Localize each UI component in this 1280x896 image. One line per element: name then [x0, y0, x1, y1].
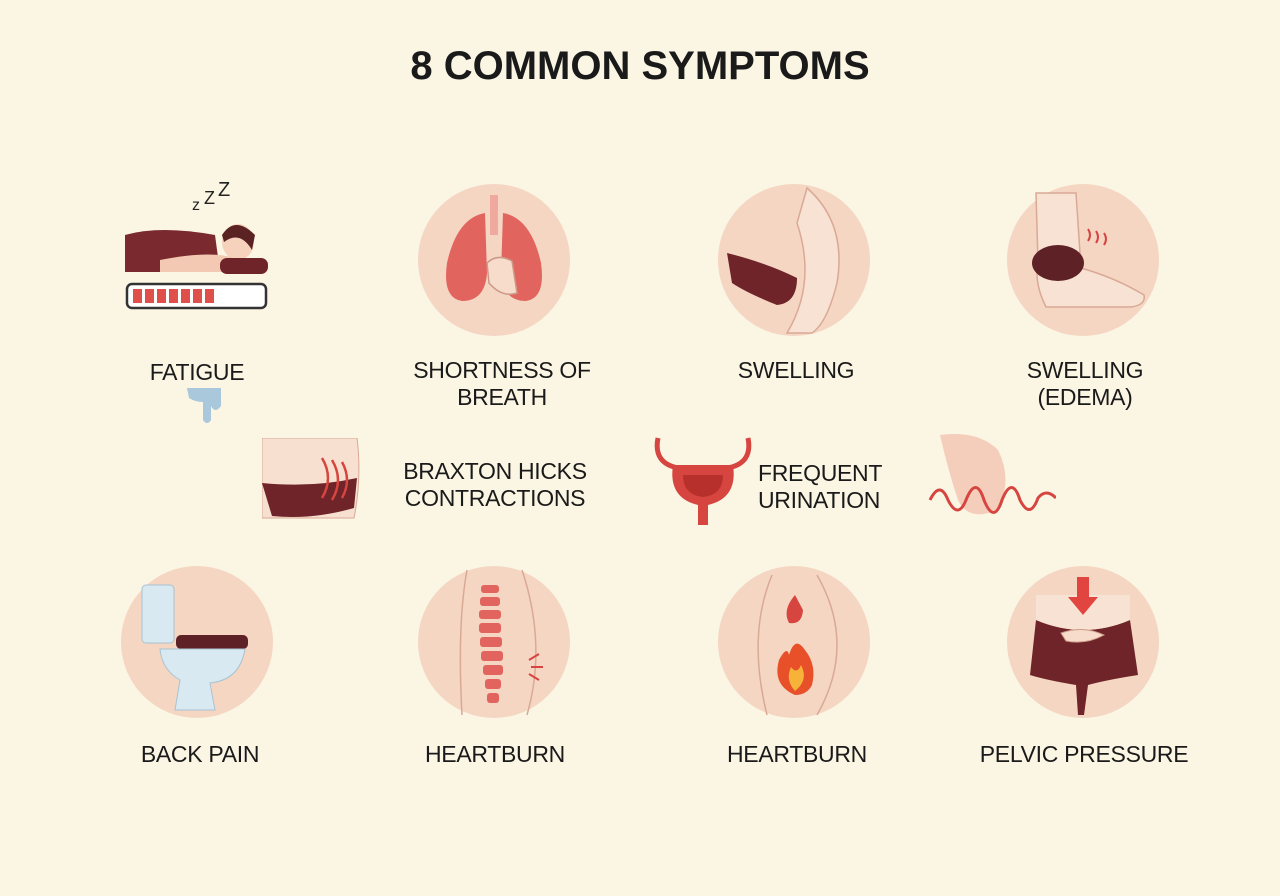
label: back pain: BACK PAIN	[141, 741, 259, 767]
icon: spine circle	[418, 566, 570, 718]
label: pelvic pressure: PELVIC PRESSURE	[980, 741, 1188, 767]
label: frequent urination	[758, 460, 882, 513]
label: braxton hicks	[403, 458, 587, 511]
label: heartburn 1: HEARTBURN	[425, 741, 565, 767]
title: 8 COMMON SYMPTOMS	[410, 44, 870, 88]
icon: pelvic pressure circle	[1007, 566, 1159, 718]
icon: pelvic wave	[928, 434, 1056, 514]
icon: swelling belly circle	[718, 184, 870, 336]
label: swelling edema	[1027, 357, 1143, 410]
label: swelling edema: (EDEMA)	[1037, 384, 1132, 410]
label: fatigue: FATIGUE	[150, 359, 244, 385]
icon: fatigue sleeping person: z	[192, 197, 200, 214]
label: shortness of breath	[413, 357, 591, 410]
icon: ankle edema circle	[1007, 184, 1159, 336]
icon: lungs circle	[418, 184, 570, 336]
label: frequent urination: URINATION	[758, 487, 880, 513]
label: braxton hicks: BRAXTON HICKS	[403, 458, 587, 484]
icon: drip	[187, 388, 221, 423]
label: swelling edema: SWELLING	[1027, 357, 1143, 383]
icon: fatigue sleeping person	[125, 180, 268, 310]
icon: heartburn flame circle	[718, 566, 870, 718]
icon: fatigue sleeping person: Z	[204, 188, 215, 208]
label: shortness of breath: BREATH	[457, 384, 547, 410]
label: swelling: SWELLING	[738, 357, 854, 383]
icon: bladder	[654, 438, 752, 525]
label: frequent urination: FREQUENT	[758, 460, 882, 486]
label: braxton hicks: CONTRACTIONS	[405, 485, 585, 511]
icon: braxton hicks	[262, 438, 360, 518]
label: heartburn 2: HEARTBURN	[727, 741, 867, 767]
label: shortness of breath: SHORTNESS OF	[413, 357, 591, 383]
icon: toilet circle	[121, 566, 273, 718]
